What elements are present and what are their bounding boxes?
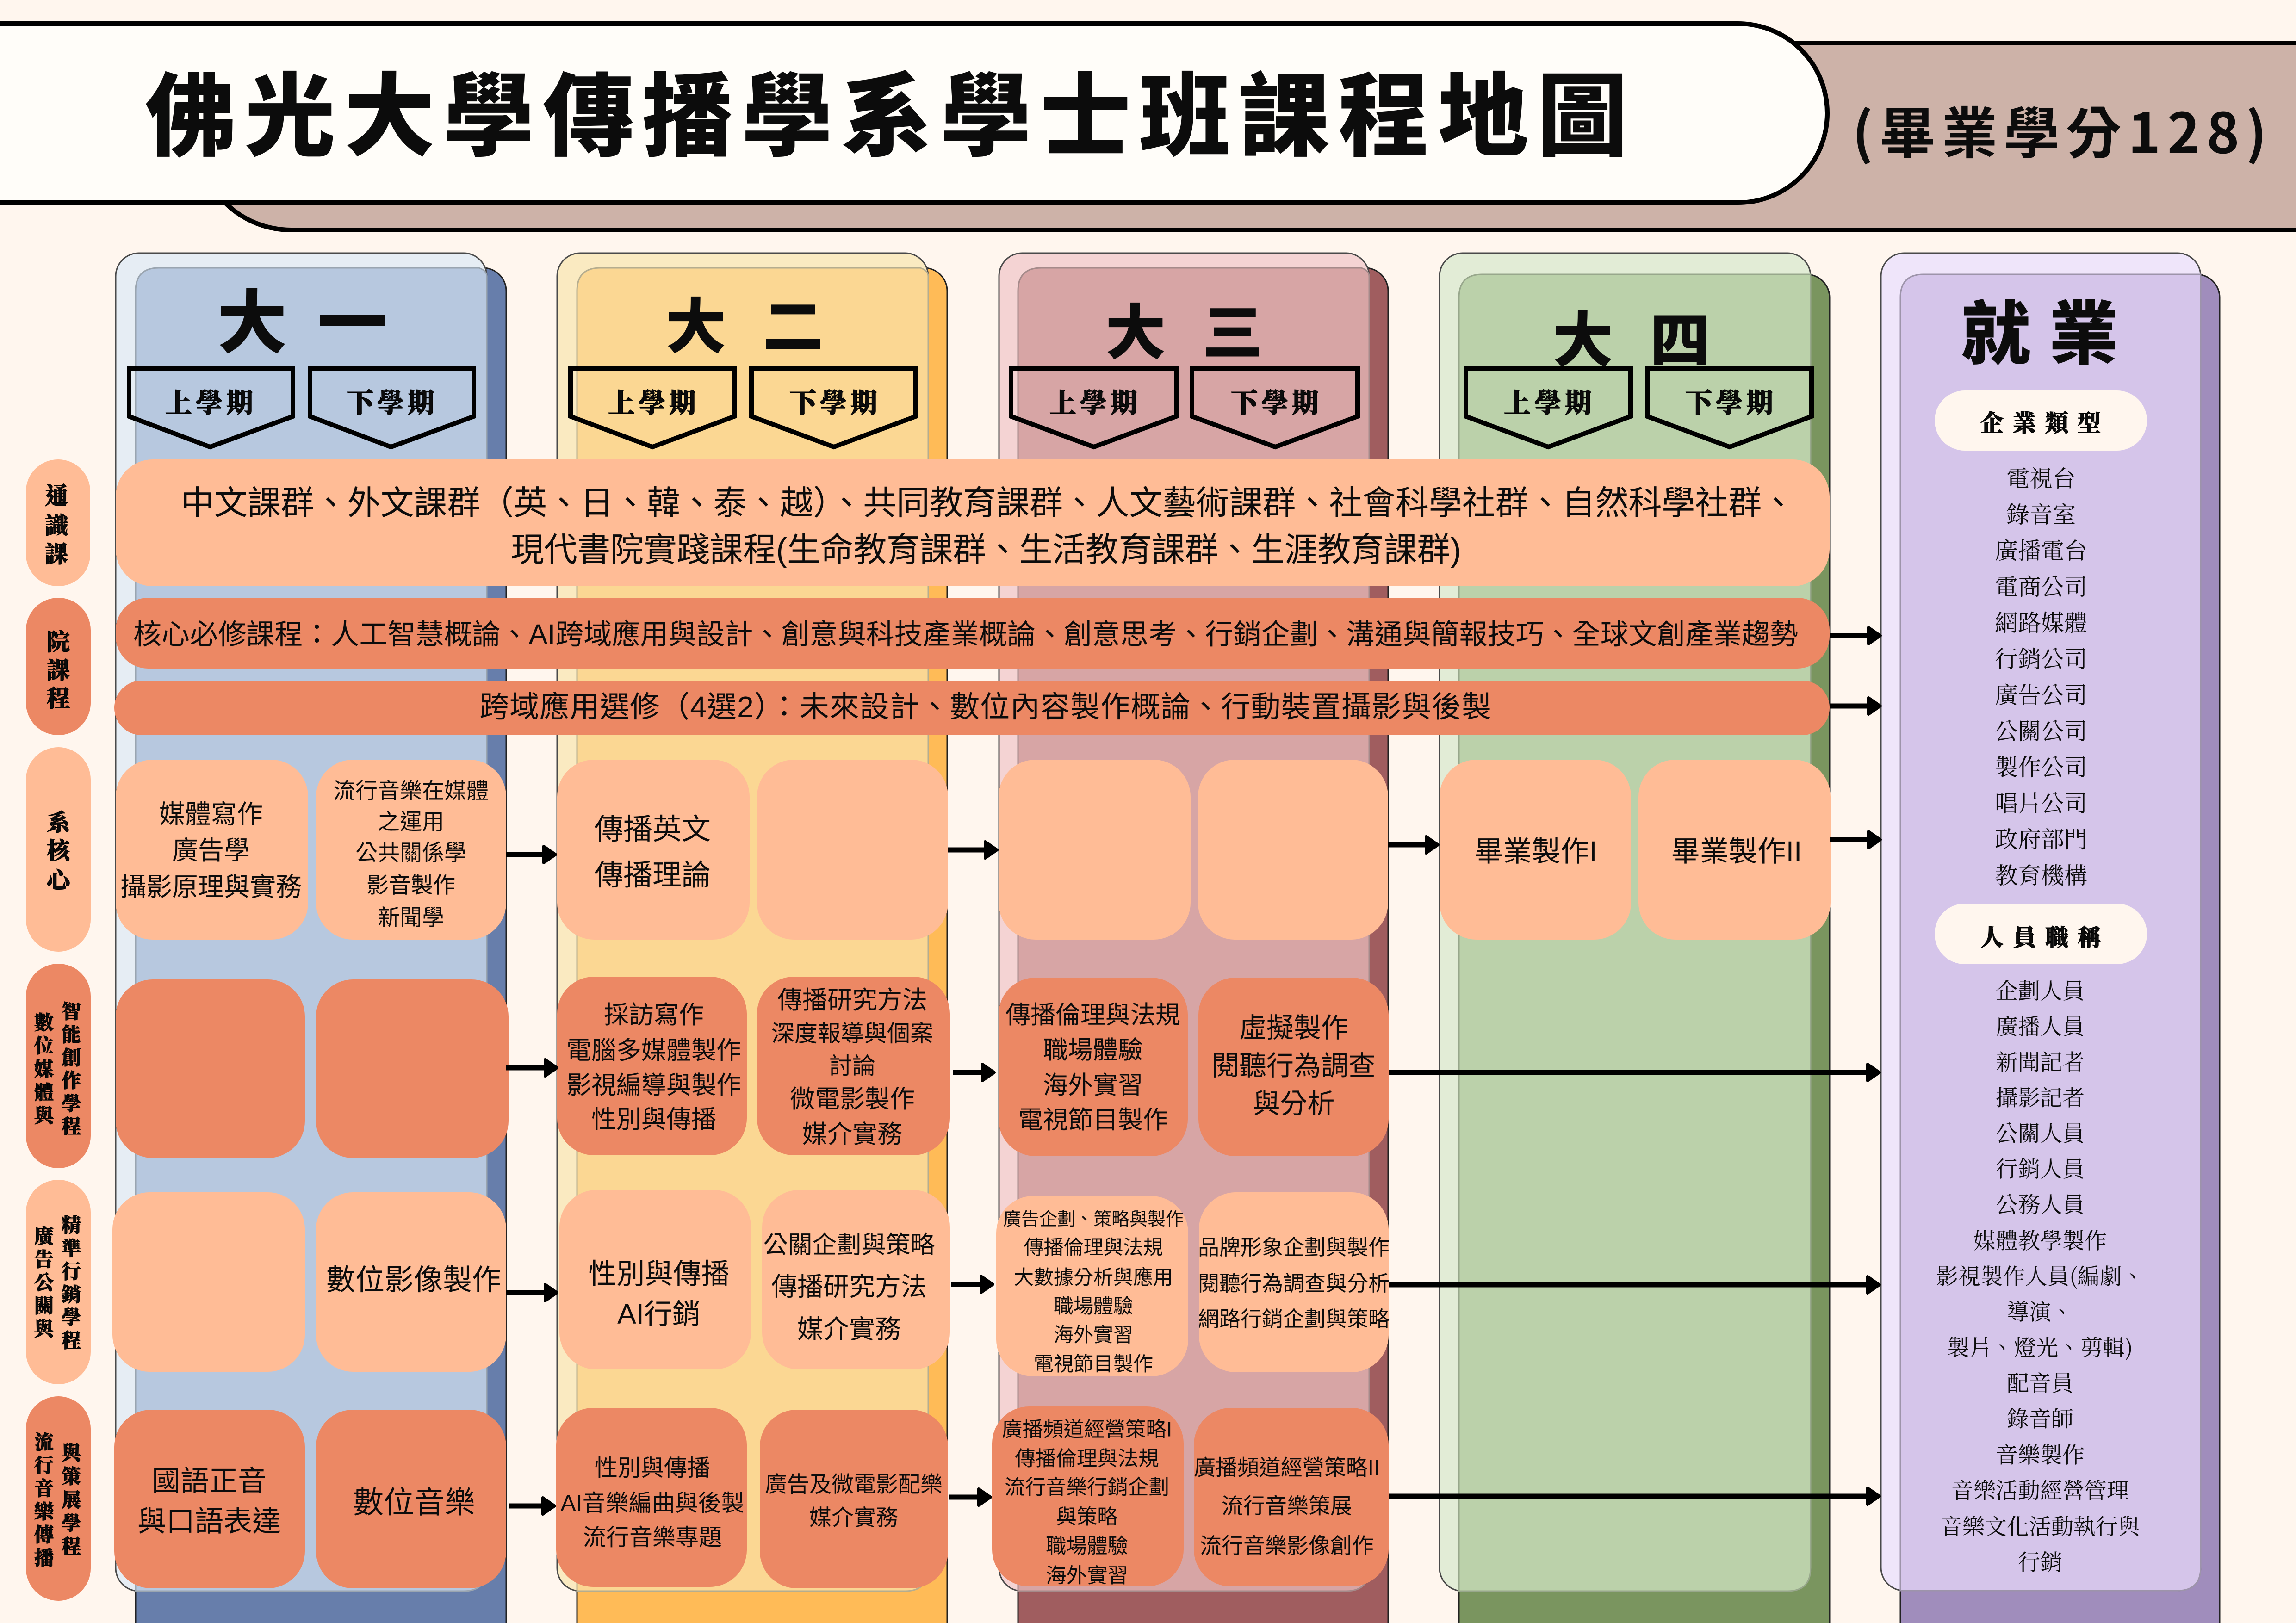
cell: year 3 first semester digital media: 電視節目製作 [1018,1106,1168,1134]
semester tag: first [129,368,293,447]
list: company types: 政府部門 [1995,821,2087,855]
cell: year 2 second semester music: 媒介實務 [809,1505,898,1530]
cell: year 2 second semester advertising [762,1190,950,1369]
heading: 大三: 大三 [1105,285,1300,372]
cell: year 3 first semester advertising: 傳播倫理與法規 [1024,1237,1163,1259]
arrow: core year 2 to year 3 [948,842,997,858]
banner: general education courses [116,459,1830,586]
cell: year 3 first semester advertising: 海外實習 [1054,1324,1133,1346]
cell: year 2 first semester core: 傳播英文 [594,813,711,846]
arrow: required courses to careers [1830,627,1880,644]
cell: year 2 second semester core (empty) [757,760,948,940]
cell: year 2 first semester music: 性別與傳播 [595,1455,710,1481]
row label: department core [26,747,91,952]
list: company types: 教育機構 [1995,857,2087,891]
cell: year 2 first semester music: 流行音樂專題 [583,1524,722,1550]
title banner [0,24,1827,203]
arrow: electives to careers [1830,698,1880,714]
cell: year 2 first semester music [556,1408,747,1587]
cell: year 2 second semester digital media: 討論 [829,1053,875,1079]
cell: year 2 second semester digital media: 媒介實務 [802,1121,902,1148]
row label: department core: 系核心 [47,804,74,895]
banner: general education courses: 現代書院實踐課程(生命教育課群、生活教育課群、生涯教育課群) [511,532,1461,569]
cell: year 3 first semester music [992,1406,1184,1587]
semester tag: second: 下學期 [347,381,438,420]
cell: year 1 first semester (empty) [112,1192,305,1372]
row label: digital media and AI creation: 數位媒體與 [34,1008,57,1128]
cell: capstone I: 畢業製作I [1474,836,1597,868]
semester tag: second [310,368,474,447]
pill: company types [1935,390,2147,451]
cell: year 1 second semester core: 流行音樂在媒體 [333,779,489,803]
cell: capstone II: 畢業製作II [1671,836,1802,868]
semester tag: second [751,368,916,447]
cell: year 3 first semester advertising: 職場體驗 [1054,1295,1133,1318]
cell: year 3 second semester digital media: 與分析 [1253,1089,1335,1119]
cell: year 1 first semester core: 廣告學 [172,836,250,865]
list: company types: 錄音室 [2006,496,2076,530]
list: job titles: 音樂製作 [1996,1437,2085,1469]
semester tag: second: 下學期 [789,381,881,420]
arrow: advertising year 2 to year 3 [951,1276,993,1293]
cell: year 2 first semester core [557,760,750,940]
cell: capstone II [1638,760,1831,940]
cell: year 3 first semester digital media: 傳播倫理與法規 [1005,1001,1180,1029]
arrow: digital media year 2 to year 3 [953,1064,994,1081]
pill: job titles [1935,904,2147,964]
list: job titles: 公關人員 [1996,1116,2085,1147]
semester tag: first: 上學期 [1049,381,1141,420]
cell: year 2 first semester digital media: 採訪寫作 [604,1001,704,1029]
cell: year 3 second semester advertising: 閱聽行為調查與分析 [1198,1271,1390,1295]
cell: year 3 first semester advertising: 電視節目製作 [1034,1353,1153,1375]
cell: year 3 second semester advertising: 網路行銷企劃與策略 [1198,1307,1390,1331]
cell: year 2 second semester advertising: 公關企劃與策略 [763,1232,935,1258]
list: company types: 網路媒體 [1995,605,2087,638]
cell: year 1 first semester music [114,1410,305,1588]
row: advertising and PR [112,1190,1390,1376]
row: department core [116,760,1831,940]
cell: year 1 second semester core: 新聞學 [378,906,444,930]
list: job titles: 企劃人員 [1996,973,2085,1005]
pill: job titles: 人員職稱 [1980,919,2110,953]
list: job titles: 行銷人員 [1996,1151,2085,1183]
list: job titles: 廣播人員 [1996,1009,2085,1041]
cell: year 2 second semester advertising: 媒介實務 [797,1315,901,1344]
row label: general education [26,459,90,586]
cell: year 1 second semester core: 之運用 [378,810,444,835]
semester tag: second: 下學期 [1685,381,1777,420]
semester tag: first [1011,368,1176,447]
semester tag: first: 上學期 [1504,381,1595,420]
cell: year 3 first semester digital media: 海外實習 [1043,1072,1143,1099]
list: job titles: 配音員 [2007,1366,2073,1397]
list: company types: 製作公司 [1995,749,2087,782]
cell: year 1 second semester music: 數位音樂 [353,1485,475,1519]
cell: year 2 first semester core: 傳播理論 [594,859,711,892]
cell: year 3 first semester advertising [996,1196,1188,1376]
panel: careers column [1881,253,2220,1623]
cell: year 1 second semester core [316,760,506,940]
list: job titles: 音樂文化活動執行與 [1940,1509,2141,1541]
row label: college courses [26,598,91,735]
row label: pop music [26,1396,91,1601]
cell: year 2 second semester digital media: 微電影製作 [790,1085,915,1113]
cell: year 2 second semester digital media: 傳播研究方法 [777,986,927,1014]
cell: year 3 second semester music: 流行音樂影像創作 [1200,1533,1374,1558]
list: job titles [1936,973,2144,1577]
semester tag: first: 上學期 [608,381,700,420]
cell: year 2 second semester digital media: 深度報導與個案 [771,1021,933,1047]
list: job titles: 行銷 [2018,1544,2062,1577]
arrow: core year 1 to year 2 [506,846,556,863]
list: job titles: 媒體教學製作 [1973,1223,2107,1255]
cell: year 3 first semester advertising: 大數據分析與應用 [1014,1267,1173,1289]
cell: year 3 second semester music: 流行音樂策展 [1222,1493,1352,1518]
cell: year 3 first semester music: 廣播頻道經營策略I [1002,1419,1172,1441]
cell: year 1 second semester core: 公共關係學 [355,841,466,865]
list: job titles: 攝影記者 [1996,1080,2085,1112]
arrow: music to careers [1389,1488,1880,1505]
row label: advertising and PR: 廣告公關與 [34,1221,57,1342]
list: company types: 廣告公司 [1995,677,2087,710]
list: company types: 廣播電台 [1995,533,2087,566]
cell: year 1 first semester music: 與口語表達 [137,1505,281,1538]
cell: year 3 first semester advertising: 廣告企劃、策略與製作 [1003,1209,1184,1230]
title: 佛光大學傳播學系學士班課程地圖 [145,43,1628,175]
cell: year 1 second semester advertising [316,1192,506,1372]
cell: year 3 first semester music: 海外實習 [1046,1565,1128,1587]
heading: 大二: 大二 [666,279,860,365]
banner: general education courses: 中文課群、外文課群（英、日、韓、泰、越）、共同教育課群、人文藝術課群、社會科學社群、自然科學社群、 [181,485,1795,522]
cell: year 3 first semester music: 傳播倫理與法規 [1015,1447,1159,1470]
banner: college required courses: 核心必修課程：人工智慧概論、AI跨域應用與設計、創意與科技產業概論、創意思考、行銷企劃、溝通與簡報技巧、全球文創產業趨勢 [133,619,1798,650]
cell: year 3 second semester music: 廣播頻道經營策略II [1194,1456,1380,1480]
list: job titles: 影視製作人員(編劇、 [1936,1258,2144,1291]
arrow: core year 3 to year 4 [1388,836,1438,853]
panel: freshman year column [116,253,506,1623]
cell: year 3 second semester core (empty) [1198,760,1388,940]
semester tag: first [1466,368,1631,447]
cell: year 2 first semester digital media: 性別與傳播 [591,1106,716,1134]
list: job titles: 導演、 [2007,1295,2073,1326]
arrow: music year 1 to year 2 [509,1498,555,1514]
panel: sophomore year column [557,253,947,1623]
cell: year 3 second semester music [1194,1408,1389,1586]
list: company types [1995,460,2087,891]
header band: brown backing with credit note [198,43,2296,230]
semester tag: second: 下學期 [1231,381,1322,420]
row label: pop music: 與策展學程 [61,1438,84,1559]
cell: year 2 first semester digital media: 電腦多媒體製作 [566,1037,741,1065]
list: company types: 行銷公司 [1995,641,2087,674]
cell: year 3 first semester music: 職場體驗 [1046,1535,1128,1557]
row label: advertising and PR: 精準行銷學程 [61,1210,81,1353]
row label: advertising and PR [26,1180,91,1384]
heading: 就業: 就業 [1961,279,2137,378]
arrow: digital media year 1 to year 2 [506,1059,557,1076]
cell: year 1 second semester advertising: 數位影像製作 [326,1264,501,1296]
cell: year 2 first semester music: AI音樂編曲與後製 [560,1490,745,1516]
cell: year 2 first semester advertising: 性別與傳播 [588,1258,730,1289]
heading: 大四: 大四 [1553,292,1747,379]
cell: year 3 first semester digital media: 職場體驗 [1043,1036,1143,1064]
cell: year 1 first semester core: 媒體寫作 [159,799,263,829]
arrow: music year 2 to year 3 [949,1489,991,1505]
subtitle: graduation credits: (畢業學分128) [1852,89,2267,169]
cell: year 3 first semester core (empty) [999,760,1191,940]
pill: company types: 企業類型 [1980,405,2110,438]
semester tag: second [1192,368,1358,447]
semester tag: first: 上學期 [165,381,257,420]
cell: year 2 first semester advertising [559,1190,751,1369]
list: company types: 唱片公司 [1995,785,2087,818]
panel: junior year column [999,253,1388,1623]
cell: year 1 first semester music: 國語正音 [152,1466,267,1497]
cell: year 3 first semester music: 流行音樂行銷企劃 [1005,1476,1169,1499]
cell: year 3 second semester advertising: 品牌形象企劃與製作 [1198,1235,1390,1259]
semester tag: second [1647,368,1812,447]
cell: year 3 first semester music: 與策略 [1056,1505,1118,1529]
heading: 大一: 大一 [217,267,417,367]
list: job titles: 公務人員 [1996,1187,2085,1219]
arrow: advertising year 1 to year 2 [506,1284,557,1301]
cell: year 3 first semester digital media [999,978,1188,1156]
arrow: digital media to careers [1389,1064,1880,1081]
row: pop music [114,1406,1389,1588]
cell: year 2 second semester advertising: 傳播研究方法 [771,1272,927,1301]
cell: year 1 first semester (empty) [116,979,305,1158]
cell: year 1 second semester music [316,1410,506,1588]
list: job titles: 音樂活動經營管理 [1951,1473,2129,1505]
row: digital media and AI creation [116,977,1389,1158]
banner: cross-domain electives [114,681,1830,735]
list: job titles: 製片、燈光、剪輯) [1947,1330,2133,1362]
cell: year 1 first semester core [116,760,308,940]
row label: college courses: 院課程 [47,624,70,713]
list: job titles: 錄音師 [2007,1401,2073,1433]
list: company types: 公關公司 [1995,713,2087,746]
list: job titles: 新聞記者 [1996,1045,2085,1076]
cell: year 2 second semester digital media [757,977,950,1155]
cell: year 3 second semester digital media [1198,978,1389,1156]
arrow: core to careers [1830,831,1880,848]
cell: year 3 second semester digital media: 虛擬製作 [1239,1013,1348,1043]
cell: year 3 second semester digital media: 閱聽行為調查 [1212,1051,1376,1081]
cell: year 2 first semester advertising: AI行銷 [617,1298,701,1330]
panel: senior year column [1440,253,1830,1623]
cell: year 2 second semester music [760,1410,948,1588]
list: company types: 電商公司 [1995,569,2087,602]
row label: pop music: 流行音樂傳播 [34,1427,55,1571]
list: company types: 電視台 [2006,460,2076,494]
cell: year 1 first semester core: 攝影原理與實務 [120,873,302,901]
cell: year 1 second semester core: 影音製作 [366,873,455,898]
row label: digital media and AI creation: 智能創作學程 [61,997,81,1139]
cell: year 2 first semester digital media [557,977,747,1155]
cell: year 1 second semester (empty) [316,979,509,1158]
cell: year 2 first semester digital media: 影視編導與製作 [566,1072,741,1099]
cell: capstone I [1440,760,1631,940]
cell: year 2 second semester music: 廣告及微電影配樂 [765,1472,943,1497]
arrow: advertising to careers [1389,1276,1880,1293]
semester tag: first [571,368,734,447]
row label: digital media and AI creation [26,964,91,1168]
cell: year 3 second semester advertising [1198,1192,1390,1372]
banner: cross-domain electives: 跨域應用選修（4選2）：未來設計、數位內容製作概論、行動裝置攝影與後製 [479,690,1491,724]
banner: college required courses [116,598,1830,669]
row label: general education: 通識課 [45,477,70,569]
